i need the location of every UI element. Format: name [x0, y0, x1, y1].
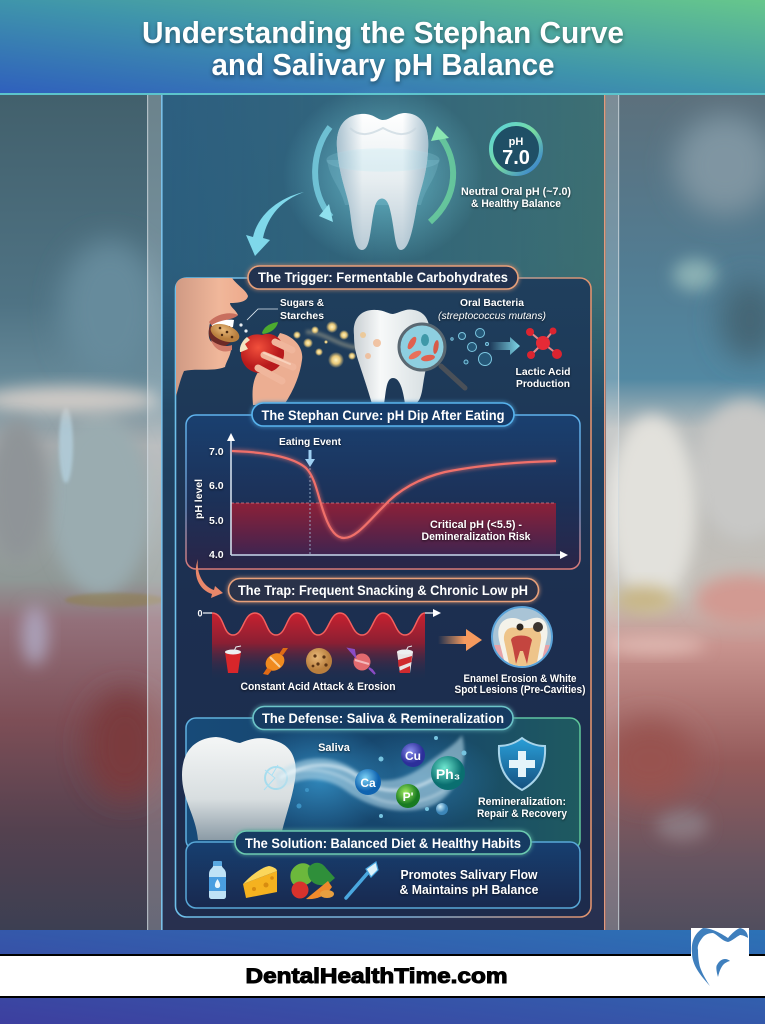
label: oral bacteria: (streptococcus mutans) — [438, 310, 546, 322]
illustration: face eating apple — [176, 278, 248, 396]
label: critical pH: Critical pH (<5.5) - — [430, 519, 522, 531]
mineral: Cu — [401, 743, 425, 767]
mineral: Ca — [355, 769, 381, 795]
heading: defense — [253, 706, 513, 730]
icon: toothbrush — [346, 862, 378, 898]
icon: soda cup — [225, 646, 241, 673]
text: promotes salivary flow: Promotes Salivary Flow — [400, 867, 538, 882]
label: sugars & starches: Starches — [280, 310, 324, 322]
title: and Salivary pH Balance — [212, 47, 554, 82]
heading: solution — [235, 831, 531, 854]
icon: healthy tooth with balance arrows — [283, 85, 483, 265]
label: lactic acid: Lactic Acid — [516, 366, 570, 378]
icon: pH 7.0 ring — [491, 124, 541, 174]
mineral: Cu: Cu — [405, 749, 421, 763]
mineral: Ca: Ca — [360, 776, 376, 790]
logo: tooth — [691, 928, 749, 996]
heading: stephan curve: The Stephan Curve: pH Dip After Eating — [262, 407, 504, 423]
icon: vegetables — [290, 863, 335, 899]
label: saliva: Saliva — [318, 742, 351, 754]
chart: repeated acid attacks — [197, 608, 441, 680]
axes — [227, 433, 568, 559]
heading: defense: The Defense: Saliva & Remineralization — [262, 710, 504, 726]
text: enamel erosion: Spot Lesions (Pre-Cavities) — [454, 684, 586, 696]
label: remineralization: Remineralization: — [478, 796, 566, 808]
center column panel — [147, 95, 619, 930]
label: sugars & starches — [239, 297, 324, 333]
stephan curve line — [232, 451, 556, 538]
arrow: to enamel erosion — [438, 629, 482, 651]
icon: magnifying glass with bacteria — [399, 324, 465, 388]
eating event label: Eating Event — [279, 436, 341, 448]
label: critical pH: Demineralization Risk — [422, 531, 531, 543]
background: blurred left tooth photo — [0, 95, 165, 930]
arrow: to trap — [196, 559, 223, 598]
arrow: to lactic acid — [490, 337, 520, 355]
heading: trigger: The Trigger: Fermentable Carbohydrates — [258, 269, 508, 285]
sugar particles — [293, 321, 358, 368]
panel: solution — [186, 842, 580, 908]
icon: pH 7.0 ring: 7.0 — [502, 147, 530, 169]
icon: cheese — [243, 866, 277, 898]
label: oral bacteria — [438, 297, 546, 322]
label: lactic acid — [516, 366, 570, 390]
y-axis labels: 6.0 — [209, 480, 224, 492]
label: oral bacteria: Oral Bacteria — [460, 297, 524, 309]
icon: lactic acid molecule — [526, 328, 562, 359]
icon: wrapped candy — [262, 648, 288, 675]
heading: stephan curve — [252, 403, 514, 426]
bubbles — [451, 328, 492, 366]
text: constant acid attack: Constant Acid Attack & Erosion — [240, 681, 396, 693]
text: neutral oral pH: Neutral Oral pH (~7.0) — [461, 186, 571, 198]
label: critical pH — [422, 519, 531, 543]
icon: pH 7.0 ring: pH — [509, 136, 523, 148]
heading: trigger — [248, 266, 518, 289]
title: Understanding the Stephan Curve — [142, 15, 624, 50]
text: enamel erosion: Enamel Erosion & White — [464, 673, 576, 685]
saliva stream — [275, 735, 466, 818]
mineral: P: P' — [403, 790, 414, 804]
icon: decayed tooth cross-section — [492, 607, 552, 670]
y-axis labels: 7.0 — [209, 446, 224, 458]
background: blurred right tooth photo — [605, 95, 765, 930]
icon: cookie — [306, 648, 332, 674]
heading: trap — [228, 578, 538, 602]
y-axis labels: 4.0 — [209, 549, 224, 561]
website name: DentalHealthTime.com — [246, 965, 508, 988]
illustration: tooth with repair — [182, 737, 296, 840]
mineral: Ph: Ph₃ — [436, 766, 460, 782]
panel: trigger — [176, 278, 591, 917]
chart: repeated acid attacks: 0 — [197, 608, 203, 618]
header band — [0, 0, 765, 95]
panel: defense — [182, 718, 580, 850]
y-axis labels: 5.0 — [209, 515, 224, 527]
label: remineralization — [477, 796, 568, 820]
label: lactic acid: Production — [516, 378, 570, 390]
illustration: apple in hand — [240, 322, 302, 405]
icon: purple wrapped candy — [349, 649, 375, 674]
footer band — [0, 930, 765, 1024]
text: neutral oral pH — [461, 186, 571, 210]
label: sugars & starches: Sugars & — [280, 297, 324, 309]
icon: shield with cross — [499, 738, 545, 790]
text: promotes salivary flow — [400, 867, 538, 897]
title — [142, 15, 624, 82]
heading: solution: The Solution: Balanced Diet & Healthy Habits — [245, 835, 521, 851]
y-axis labels: pH level — [194, 479, 205, 519]
y-axis labels — [194, 446, 224, 561]
eating event label — [279, 436, 341, 467]
mineral: Ph — [431, 756, 465, 790]
icon: striped soda cup — [397, 646, 413, 673]
mineral: P — [396, 784, 420, 808]
label: remineralization: Repair & Recovery — [477, 808, 568, 820]
panel: stephan curve chart — [186, 415, 580, 569]
illustration: tooth with bacteria — [354, 310, 430, 404]
icon: water bottle — [209, 861, 226, 899]
heading: trap: The Trap: Frequent Snacking & Chronic Low pH — [238, 582, 528, 598]
text: neutral oral pH: & Healthy Balance — [471, 198, 561, 210]
critical pH zone — [231, 503, 556, 555]
text: enamel erosion — [454, 673, 586, 696]
arrow: down to trigger — [246, 192, 304, 256]
text: promotes salivary flow: & Maintains pH Balance — [400, 882, 538, 897]
